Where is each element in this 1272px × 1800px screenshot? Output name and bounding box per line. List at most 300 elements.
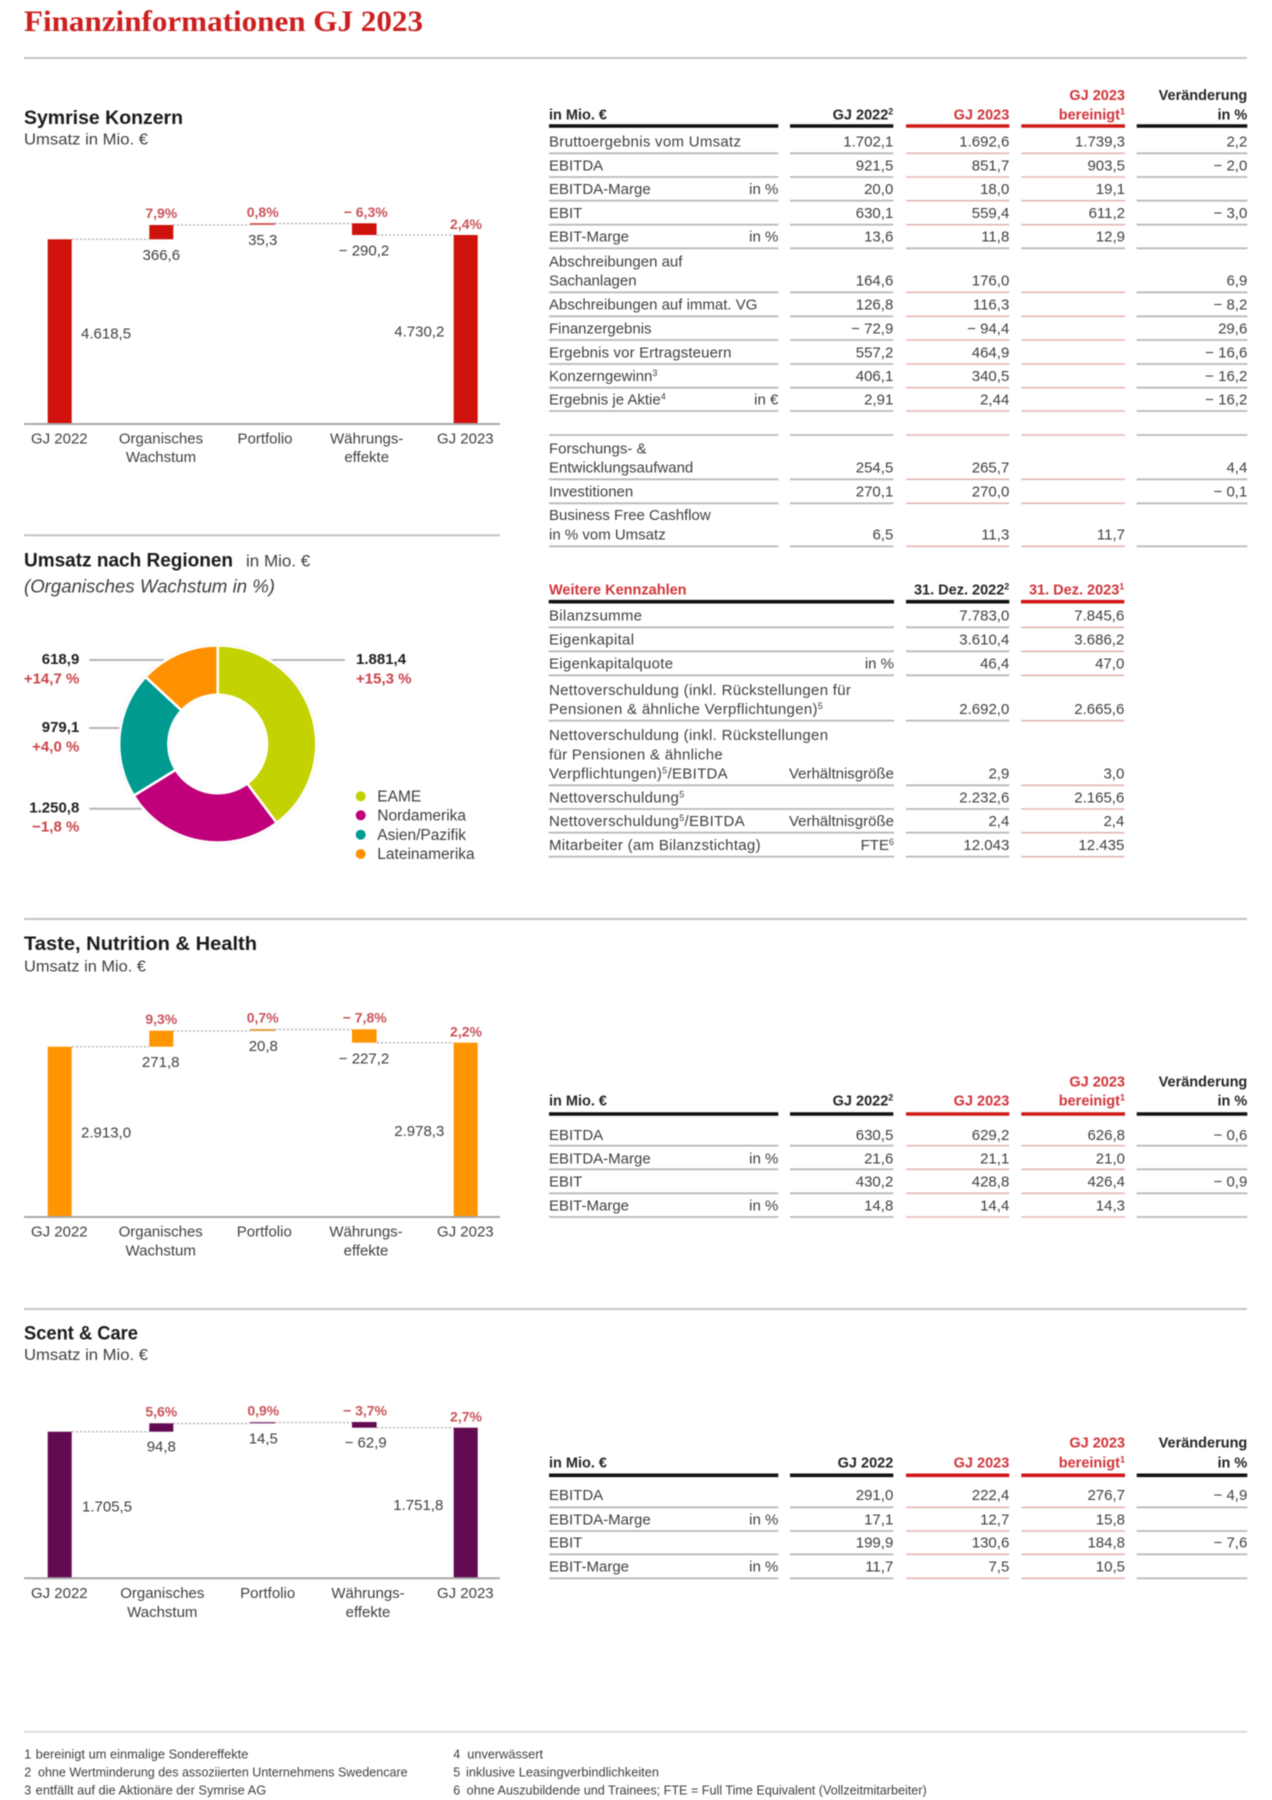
row: Eigenkapitalquote: Eigenkapitalquote xyxy=(549,656,673,672)
segment: Nordamerika xyxy=(134,770,277,842)
bar values: 4.618,5 xyxy=(81,326,131,343)
table: Weitere Kennzahlen xyxy=(549,581,1124,857)
bar values xyxy=(81,232,444,343)
row: Ergebnis je Aktie: 4 xyxy=(661,391,666,401)
row: Eigenkapitalquote: in % xyxy=(865,656,894,672)
table: Scent & Care key figures xyxy=(549,1436,1247,1578)
bar values: 4.730,2 xyxy=(394,324,444,341)
bar values: − 62,9 xyxy=(345,1435,387,1452)
legend: Nordamerika xyxy=(377,808,466,825)
axis labels: Wachstum xyxy=(127,1604,197,1621)
row: Forschungs- & Entwicklungsaufwand: Forschungs- & xyxy=(549,440,647,457)
footnotes: inklusive Leasingverbindlichkeiten xyxy=(466,1766,659,1780)
row: Mitarbeiter: Mitarbeiter (am Bilanzstichtag) xyxy=(549,837,761,854)
row: EBIT: EBIT xyxy=(549,1174,582,1191)
footnotes: 4 xyxy=(453,1747,460,1761)
bar: Portfolio xyxy=(250,1422,275,1424)
row: Abschreibungen auf immat. VG xyxy=(549,297,1247,314)
title: Finanzinformationen GJ 2023 xyxy=(24,5,423,38)
callout: Nordamerika xyxy=(29,799,79,836)
heading: Taste, Nutrition & Health xyxy=(24,934,257,955)
axis labels: effekte xyxy=(344,449,389,466)
bar values: 14,5 xyxy=(249,1431,278,1448)
row: Finanzergebnis: − 72,9 xyxy=(851,320,893,337)
row: EBIT-Marge: 11,8 xyxy=(981,229,1009,246)
row: EBIT: 630,1 xyxy=(856,205,893,222)
bar values: 366,6 xyxy=(143,247,180,264)
row: Nettoverschuldung / EBITDA: 5 xyxy=(679,813,684,823)
row: Bruttoergebnis vom Umsatz: 1.739,3 xyxy=(1075,134,1125,151)
row: Bilanzsumme xyxy=(549,608,1124,624)
row: Nettoverschuldung xyxy=(549,790,1124,806)
row: Ergebnis vor Ertragsteuern: Ergebnis vor Ertragsteuern xyxy=(549,344,732,361)
row: EBIT-Marge: EBIT-Marge xyxy=(549,1559,629,1576)
table header: in % xyxy=(1217,1455,1247,1471)
table header: Weitere Kennzahlen xyxy=(549,582,687,598)
row: EBIT: EBIT xyxy=(549,205,582,222)
subheading: Umsatz in Mio. € xyxy=(24,959,146,976)
axis labels: Organisches xyxy=(119,430,203,447)
axis labels xyxy=(31,430,494,466)
growth percentages: 0,8% xyxy=(247,204,279,220)
row: Abschreibungen auf Sachanlagen xyxy=(549,254,1247,290)
row: EBIT-Marge: 14,4 xyxy=(980,1198,1009,1215)
row: Finanzergebnis: Finanzergebnis xyxy=(549,320,652,337)
table header: GJ 2023 xyxy=(1069,1075,1125,1091)
row: Business Free Cashflow: 6,5 xyxy=(872,527,893,544)
callout: Lateinamerika: +14,7 % xyxy=(24,670,79,687)
row: Nettoverschuldung inkl. Rückstellungen: 2.692,0 xyxy=(959,701,1009,718)
row: EBITDA-Marge: 19,1 xyxy=(1096,181,1125,198)
row: Eigenkapitalquote: 47,0 xyxy=(1095,656,1124,672)
panel: Symrise Konzern revenue xyxy=(24,108,500,466)
row: Bruttoergebnis vom Umsatz: 1.702,1 xyxy=(843,134,893,151)
subheading: Umsatz in Mio. € xyxy=(24,1347,148,1364)
callout: Nordamerika: 1.250,8 xyxy=(29,799,79,816)
axis labels: effekte xyxy=(344,1242,388,1259)
bar: GJ 2023 xyxy=(454,235,478,424)
row: EBITDA: 629,2 xyxy=(972,1127,1009,1144)
footnotes xyxy=(24,1747,927,1797)
row: Business Free Cashflow: Business Free Cashflow xyxy=(549,507,711,524)
table header: GJ 2023 xyxy=(1069,88,1125,104)
growth percentages: − 7,8% xyxy=(343,1010,387,1026)
callout: EAME: +15,3 % xyxy=(356,670,411,687)
bar: Portfolio xyxy=(250,223,275,225)
row: Nettoverschuldung inkl. Rückstellungen / EBITDA: /EBITDA xyxy=(668,766,728,783)
row: Finanzergebnis: 29,6 xyxy=(1218,320,1247,337)
row: Business Free Cashflow: 11,7 xyxy=(1097,527,1125,544)
row: Investitionen: Investitionen xyxy=(549,484,633,501)
panel: Taste, Nutrition & Health xyxy=(24,934,500,1259)
waterfall chart: Taste, Nutrition & Health xyxy=(24,1010,500,1259)
row: EBIT: 426,4 xyxy=(1087,1174,1125,1191)
row: Konzerngewinn: 3 xyxy=(652,368,657,378)
row: Eigenkapitalquote xyxy=(549,656,1124,672)
table header: 2 xyxy=(888,106,893,116)
row: Nettoverschuldung / EBITDA: 2,4 xyxy=(988,813,1009,830)
row: Bruttoergebnis vom Umsatz xyxy=(549,134,1247,151)
table: Taste, Nutrition & Health key figures xyxy=(549,1075,1247,1217)
row: EBIT-Marge: 11,7 xyxy=(865,1559,893,1576)
table header: 1 xyxy=(1119,581,1124,591)
row: Mitarbeiter: 12.435 xyxy=(1078,837,1124,854)
bar: Währungseffekte xyxy=(352,223,377,235)
heading: in Mio. € xyxy=(246,552,311,571)
row: EBIT: EBIT xyxy=(549,1535,582,1552)
table header: 2 xyxy=(888,1093,893,1103)
row: EBIT: 428,8 xyxy=(972,1174,1009,1191)
row: Ergebnis je Aktie: Ergebnis je Aktie xyxy=(549,391,661,408)
row: EBIT-Marge: in % xyxy=(749,1559,778,1576)
growth percentages: − 6,3% xyxy=(344,204,388,220)
axis labels: GJ 2022 xyxy=(31,430,88,447)
row: Finanzergebnis: − 94,4 xyxy=(967,320,1009,337)
callout: Lateinamerika: 618,9 xyxy=(42,651,79,668)
waterfall chart: Scent & Care xyxy=(24,1402,500,1621)
row: Bilanzsumme: 7.783,0 xyxy=(959,608,1009,624)
growth percentages xyxy=(145,204,483,232)
growth percentages xyxy=(145,1010,483,1040)
row: Abschreibungen auf immat. VG: 116,3 xyxy=(973,297,1009,314)
bar: GJ 2023 xyxy=(454,1428,478,1578)
growth percentages: 0,7% xyxy=(247,1010,279,1026)
bar: Portfolio xyxy=(250,1029,275,1031)
table header: 1 xyxy=(1120,106,1125,116)
row: Nettoverschuldung inkl. Rückstellungen / EBITDA: 2,9 xyxy=(988,766,1009,783)
row: Bruttoergebnis vom Umsatz: 1.692,6 xyxy=(959,134,1009,151)
row: Nettoverschuldung inkl. Rückstellungen / EBITDA: Nettoverschuldung (inkl. Rückstellungen xyxy=(549,727,828,744)
row: Ergebnis vor Ertragsteuern: 557,2 xyxy=(856,344,893,361)
row: EBIT-Marge: 14,8 xyxy=(864,1198,893,1215)
panel: Umsatz nach Regionen xyxy=(24,551,475,863)
row: EBIT: 611,2 xyxy=(1089,205,1125,222)
table header: in Mio. € xyxy=(549,1094,607,1110)
table header: GJ 2023 xyxy=(954,107,1009,123)
row: Nettoverschuldung inkl. Rückstellungen: 5 xyxy=(818,701,823,711)
callout: Nordamerika: −1,8 % xyxy=(32,819,79,836)
row: Abschreibungen auf Sachanlagen: Abschreibungen auf xyxy=(549,254,683,271)
row: EBIT-Marge: 12,9 xyxy=(1096,229,1125,246)
row: EBIT-Marge: in % xyxy=(749,229,778,246)
row: Nettoverschuldung / EBITDA: /EBITDA xyxy=(684,813,745,830)
bar values: 20,8 xyxy=(249,1038,278,1055)
row: EBITDA: 276,7 xyxy=(1087,1487,1125,1504)
row: EBITDA xyxy=(549,1487,1247,1504)
row: EBITDA-Marge: 21,1 xyxy=(980,1150,1009,1167)
bar values: 35,3 xyxy=(248,232,277,249)
table header: in Mio. € xyxy=(549,1455,607,1471)
bar values: 1.751,8 xyxy=(393,1497,443,1514)
bar values xyxy=(81,1038,444,1142)
row: Mitarbeiter: 6 xyxy=(889,837,894,847)
growth percentages: 0,9% xyxy=(247,1402,280,1418)
row: EBITDA: 921,5 xyxy=(856,157,893,174)
bar: Währungseffekte xyxy=(352,1422,377,1428)
row: EBITDA-Marge: in % xyxy=(749,1511,778,1528)
table header: bereinigt xyxy=(1059,1094,1120,1110)
row: EBIT-Marge xyxy=(549,1198,1125,1215)
row: EBIT-Marge: EBIT-Marge xyxy=(549,1198,629,1215)
row: Nettoverschuldung / EBITDA: Verhältnisgröße xyxy=(789,813,894,830)
row: EBIT: 130,6 xyxy=(972,1535,1009,1552)
row: EBIT-Marge: in % xyxy=(749,1198,778,1215)
row: Bilanzsumme: 7.845,6 xyxy=(1074,608,1124,624)
row: EBITDA-Marge: 18,0 xyxy=(980,181,1009,198)
row: EBITDA: 903,5 xyxy=(1087,157,1125,174)
row: EBIT-Marge: 7,5 xyxy=(988,1559,1009,1576)
row: Ergebnis je Aktie xyxy=(549,391,1247,408)
bar: Organisches Wachstum xyxy=(149,1031,173,1047)
axis labels xyxy=(31,1224,494,1259)
heading: Umsatz nach Regionen xyxy=(24,551,233,572)
row: EBIT: − 7,6 xyxy=(1214,1535,1247,1552)
table header: Veränderung xyxy=(1159,1436,1247,1452)
row: EBITDA-Marge: 17,1 xyxy=(864,1511,893,1528)
row: Investitionen: 270,0 xyxy=(972,484,1009,501)
row: Abschreibungen auf immat. VG: − 8,2 xyxy=(1214,297,1247,314)
bar values: 2.913,0 xyxy=(81,1125,131,1142)
row: Forschungs- & Entwicklungsaufwand: Entwicklungsaufwand xyxy=(549,460,693,477)
legend: Asien/Pazifik xyxy=(377,827,466,844)
row: EBITDA-Marge xyxy=(549,1150,1125,1167)
row: Investitionen: 270,1 xyxy=(856,484,893,501)
row: Nettoverschuldung: 2.232,6 xyxy=(959,790,1009,806)
table header xyxy=(549,1075,1247,1114)
table header: in % xyxy=(1217,1094,1247,1110)
bar: Organisches Wachstum xyxy=(149,1423,173,1432)
row: EBIT-Marge: 14,3 xyxy=(1096,1198,1125,1215)
row: Business Free Cashflow: in % vom Umsatz xyxy=(549,527,666,544)
table header: Veränderung xyxy=(1159,88,1247,104)
footnotes: ohne Wertminderung des assoziierten Unternehmens Swedencare xyxy=(38,1766,408,1780)
row: EBIT: 199,9 xyxy=(856,1535,893,1552)
row: Abschreibungen auf Sachanlagen: 164,6 xyxy=(856,273,893,290)
row: EBITDA: EBITDA xyxy=(549,157,603,174)
row: Konzerngewinn xyxy=(549,368,1247,385)
row: Nettoverschuldung / EBITDA: Nettoverschuldung xyxy=(549,813,679,830)
row: Mitarbeiter: 12.043 xyxy=(963,837,1009,854)
footnotes: ohne Auszubildende und Trainees; FTE = Full Time Equivalent (Vollzeitmitarbeiter) xyxy=(467,1783,927,1797)
row: Nettoverschuldung inkl. Rückstellungen / EBITDA: für Pensionen & ähnliche xyxy=(549,746,723,763)
axis labels: GJ 2023 xyxy=(437,1585,494,1602)
bar values: − 290,2 xyxy=(339,243,389,260)
row: Konzerngewinn: Konzerngewinn xyxy=(549,368,652,385)
axis labels: Wachstum xyxy=(126,449,196,466)
row: EBITDA: 291,0 xyxy=(856,1487,893,1504)
callout: EAME xyxy=(356,651,411,687)
row: Ergebnis je Aktie: 2,91 xyxy=(864,391,893,408)
row: EBITDA-Marge: EBITDA-Marge xyxy=(549,181,651,198)
row: EBITDA: − 0,6 xyxy=(1214,1127,1247,1144)
row: Eigenkapital: 3.686,2 xyxy=(1074,632,1124,648)
footnotes: unverwässert xyxy=(467,1747,544,1761)
row: Konzerngewinn: − 16,2 xyxy=(1205,368,1247,385)
row: EBIT-Marge: 13,6 xyxy=(864,229,893,246)
growth percentages: 7,9% xyxy=(145,205,178,221)
axis labels: Währungs- xyxy=(329,1224,403,1241)
row: Nettoverschuldung inkl. Rückstellungen / EBITDA: 5 xyxy=(662,766,668,776)
bar: GJ 2022 xyxy=(48,1432,72,1578)
row: Mitarbeiter: FTE xyxy=(861,837,889,854)
segment: EAME xyxy=(218,646,316,823)
row: EBITDA-Marge: 15,8 xyxy=(1096,1511,1125,1528)
table header: GJ 2023 xyxy=(954,1094,1009,1110)
row: Nettoverschuldung inkl. Rückstellungen / EBITDA: Verhältnisgröße xyxy=(789,766,894,783)
row: Forschungs- & Entwicklungsaufwand xyxy=(549,440,1247,477)
row: Nettoverschuldung: 2.165,6 xyxy=(1074,790,1124,806)
callout: Asien/Pazifik xyxy=(32,719,79,755)
footnotes: 1 xyxy=(24,1747,31,1761)
row: Investitionen xyxy=(549,484,1247,501)
row: Ergebnis je Aktie: in € xyxy=(754,391,779,408)
axis labels: Währungs- xyxy=(331,1585,405,1602)
table header: GJ 2023 xyxy=(1069,1436,1125,1452)
row: Bruttoergebnis vom Umsatz: 2,2 xyxy=(1226,134,1247,151)
footnotes: entfällt auf die Aktionäre der Symrise AG xyxy=(36,1783,266,1797)
bar values: 271,8 xyxy=(142,1054,179,1071)
waterfall chart: Konzern xyxy=(24,204,500,466)
row: EBIT xyxy=(549,1535,1247,1552)
growth percentages: 2,4% xyxy=(450,216,483,232)
table header: Veränderung xyxy=(1159,1075,1247,1091)
row: EBITDA-Marge: 21,0 xyxy=(1096,1150,1125,1167)
bar values: 1.705,5 xyxy=(82,1499,132,1516)
bar values: 94,8 xyxy=(147,1439,176,1456)
row: Nettoverschuldung inkl. Rückstellungen / EBITDA: 3,0 xyxy=(1103,766,1124,783)
axis labels: Organisches xyxy=(119,1224,203,1241)
callout: Lateinamerika xyxy=(24,651,79,687)
row: EBIT: − 3,0 xyxy=(1214,205,1247,222)
row: Eigenkapital: Eigenkapital xyxy=(549,632,634,648)
bar: Organisches Wachstum xyxy=(149,225,173,239)
table header: GJ 2022 xyxy=(833,1094,888,1110)
growth percentages: 2,2% xyxy=(450,1024,483,1040)
growth percentages xyxy=(145,1402,483,1424)
row: Bruttoergebnis vom Umsatz: Bruttoergebnis vom Umsatz xyxy=(549,134,741,151)
row: EBITDA-Marge: in % xyxy=(749,1150,778,1167)
row: EBITDA-Marge xyxy=(549,1511,1125,1528)
row: Abschreibungen auf Sachanlagen: 176,0 xyxy=(972,273,1009,290)
table header: GJ 2022 xyxy=(833,107,888,123)
row: EBITDA xyxy=(549,1127,1247,1144)
row: EBITDA: EBITDA xyxy=(549,1127,603,1144)
row: EBIT xyxy=(549,1174,1247,1191)
growth percentages: 2,7% xyxy=(450,1408,483,1424)
callout: Asien/Pazifik: 979,1 xyxy=(42,719,79,736)
italic subheading: (Organisches Wachstum in %) xyxy=(24,577,275,597)
bar: Währungseffekte xyxy=(352,1029,377,1043)
row: Ergebnis vor Ertragsteuern xyxy=(549,344,1247,361)
row: Abschreibungen auf immat. VG: Abschreibungen auf immat. VG xyxy=(549,297,757,314)
row: EBITDA-Marge: EBITDA-Marge xyxy=(549,1150,651,1167)
row: EBITDA-Marge: 20,0 xyxy=(864,181,893,198)
row: Eigenkapitalquote: 46,4 xyxy=(980,656,1009,672)
row: Nettoverschuldung inkl. Rückstellungen: 2.665,6 xyxy=(1074,701,1124,718)
row: EBITDA: 851,7 xyxy=(972,157,1009,174)
row: EBIT: 559,4 xyxy=(972,205,1009,222)
axis labels: Währungs- xyxy=(330,430,403,447)
axis labels: GJ 2023 xyxy=(437,1224,494,1241)
row: EBITDA: − 4,9 xyxy=(1214,1487,1247,1504)
table header: GJ 2023 xyxy=(954,1455,1009,1471)
axis labels: Organisches xyxy=(120,1585,204,1602)
row: EBIT: − 0,9 xyxy=(1214,1174,1247,1191)
bar: GJ 2022 xyxy=(48,1047,72,1217)
row: Abschreibungen auf Sachanlagen: Sachanlagen xyxy=(549,273,637,290)
row: EBIT xyxy=(549,205,1247,222)
row: Konzerngewinn: 340,5 xyxy=(972,368,1009,385)
row: Ergebnis vor Ertragsteuern: 464,9 xyxy=(972,344,1009,361)
row: Forschungs- & Entwicklungsaufwand: 4,4 xyxy=(1226,460,1247,477)
table header: bereinigt xyxy=(1059,1455,1120,1471)
row: EBITDA-Marge: in % xyxy=(749,181,778,198)
footnotes: 3 xyxy=(24,1783,31,1797)
table header: GJ 2022 xyxy=(838,1455,893,1471)
table header: in Mio. € xyxy=(549,107,607,123)
row: EBITDA: 626,8 xyxy=(1087,1127,1125,1144)
row: Business Free Cashflow: 11,3 xyxy=(981,527,1009,544)
row: EBITDA: EBITDA xyxy=(549,1487,603,1504)
row: Business Free Cashflow xyxy=(549,507,1125,544)
bar values: 2.978,3 xyxy=(394,1123,444,1140)
bar: GJ 2022 xyxy=(48,239,72,424)
legend: Lateinamerika xyxy=(377,846,475,863)
row: Finanzergebnis xyxy=(549,320,1247,337)
axis labels: Portfolio xyxy=(240,1585,295,1602)
row: Konzerngewinn: 406,1 xyxy=(856,368,893,385)
axis labels: Portfolio xyxy=(237,1224,292,1241)
row: EBITDA-Marge: 12,7 xyxy=(980,1511,1009,1528)
row: EBITDA-Marge xyxy=(549,181,1125,198)
footnotes: 6 xyxy=(453,1783,460,1797)
row: Nettoverschuldung inkl. Rückstellungen: Pensionen & ähnliche Verpflichtungen) xyxy=(549,701,818,718)
row: EBIT-Marge: 10,5 xyxy=(1096,1559,1125,1576)
row: Nettoverschuldung inkl. Rückstellungen: Nettoverschuldung (inkl. Rückstellungen für xyxy=(549,682,851,699)
row: Investitionen: − 0,1 xyxy=(1214,484,1247,501)
footnotes: 5 xyxy=(453,1766,460,1780)
row: Ergebnis vor Ertragsteuern: − 16,6 xyxy=(1205,344,1247,361)
row: EBIT-Marge xyxy=(549,1559,1125,1576)
row: Nettoverschuldung / EBITDA: 2,4 xyxy=(1103,813,1124,830)
row: EBIT: 430,2 xyxy=(856,1174,893,1191)
row: Nettoverschuldung: Nettoverschuldung xyxy=(549,790,679,806)
axis labels: GJ 2022 xyxy=(31,1224,88,1241)
growth percentages: − 3,7% xyxy=(343,1402,388,1418)
row: Nettoverschuldung / EBITDA xyxy=(549,813,1124,830)
row: Nettoverschuldung inkl. Rückstellungen / EBITDA xyxy=(549,727,1124,783)
callout: Asien/Pazifik: +4,0 % xyxy=(32,738,79,755)
table header: 31. Dez. 2022 xyxy=(914,582,1004,598)
row: Abschreibungen auf immat. VG: 126,8 xyxy=(856,297,893,314)
axis labels: GJ 2022 xyxy=(31,1585,88,1602)
legend: EAME xyxy=(377,789,421,806)
subheading: Umsatz in Mio. € xyxy=(24,131,148,148)
row: EBITDA: − 2,0 xyxy=(1214,157,1247,174)
row: Forschungs- & Entwicklungsaufwand: 254,5 xyxy=(856,460,893,477)
footnotes: 2 xyxy=(24,1766,31,1780)
row: Eigenkapital: 3.610,4 xyxy=(959,632,1009,648)
table header: 31. Dez. 2023 xyxy=(1029,582,1119,598)
table header: in % xyxy=(1217,107,1247,123)
table header xyxy=(549,581,1124,602)
row: Abschreibungen auf Sachanlagen: 6,9 xyxy=(1226,273,1247,290)
row: EBITDA: 630,5 xyxy=(856,1127,893,1144)
footnotes: bereinigt um einmalige Sondereffekte xyxy=(36,1747,248,1761)
bar values xyxy=(82,1431,443,1516)
axis labels: GJ 2023 xyxy=(437,430,494,447)
axis labels: Wachstum xyxy=(126,1242,196,1259)
